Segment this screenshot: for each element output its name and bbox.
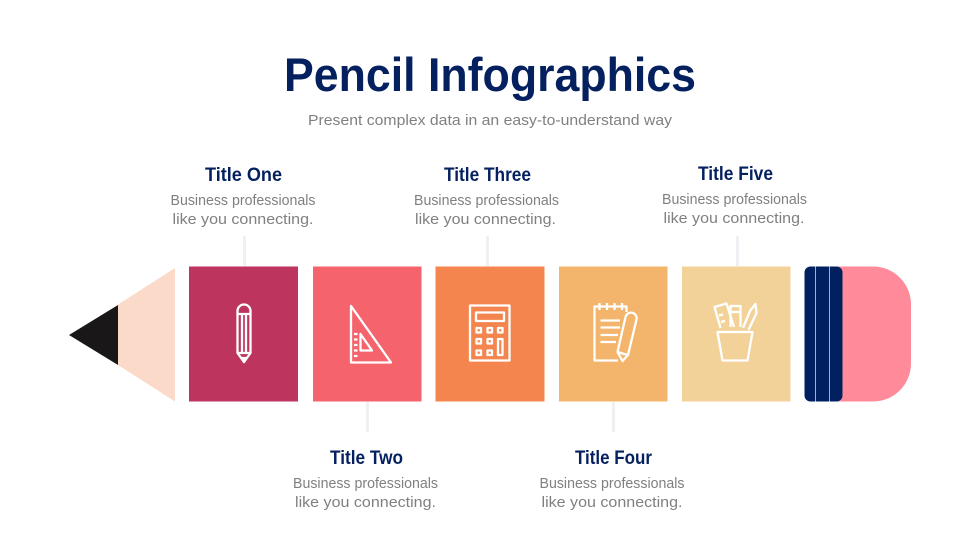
text block: title five: Title Five bbox=[698, 164, 773, 185]
text block: title one bbox=[170, 165, 316, 228]
text block: title three bbox=[414, 165, 559, 228]
text block: title three: like you connecting. bbox=[415, 212, 556, 228]
text block: title two: Business professionals bbox=[293, 476, 438, 492]
text block: title two: Title Two bbox=[330, 448, 403, 469]
text block: title five: like you connecting. bbox=[664, 211, 804, 227]
text block: title two: like you connecting. bbox=[295, 495, 436, 511]
text block: title three: Business professionals bbox=[414, 193, 559, 209]
connector: title three bbox=[486, 236, 489, 266]
text block: title one: like you connecting. bbox=[172, 212, 314, 228]
connector: title four bbox=[612, 402, 615, 432]
text block: title four bbox=[540, 448, 684, 511]
pencil tip: lead bbox=[69, 305, 118, 365]
icon: pencil cup bbox=[714, 304, 756, 360]
title: Pencil Infographics bbox=[284, 48, 696, 101]
icon: notepad and pencil bbox=[594, 303, 637, 361]
eraser bbox=[835, 266, 911, 402]
panel: segment four with notepad icon bbox=[559, 266, 668, 402]
connector: title two bbox=[366, 402, 369, 432]
pencil tip: wood bbox=[118, 268, 175, 402]
connector: title one bbox=[243, 236, 246, 266]
icon: calculator bbox=[470, 306, 510, 360]
text block: title two bbox=[293, 448, 438, 511]
subtitle: Present complex data in an easy-to-understand way bbox=[308, 112, 673, 129]
text block: title four: Business professionals bbox=[540, 476, 684, 492]
panel: segment five with pencil cup icon bbox=[682, 266, 790, 402]
text block: title one: Business professionals bbox=[170, 193, 316, 209]
text block: title four: Title Four bbox=[575, 448, 653, 469]
panel: segment one with pencil icon bbox=[189, 266, 298, 402]
text block: title one: Title One bbox=[205, 165, 282, 186]
text block: title four: like you connecting. bbox=[542, 495, 682, 511]
icon: pencil bbox=[238, 305, 250, 362]
connector: title five bbox=[736, 236, 739, 266]
ferrule bbox=[804, 266, 842, 402]
icon: set square bbox=[351, 306, 391, 362]
panel: segment two with set square icon bbox=[313, 266, 422, 402]
text block: title five bbox=[662, 164, 807, 227]
panel: segment three with calculator icon bbox=[436, 266, 544, 402]
text block: title five: Business professionals bbox=[662, 192, 807, 208]
text block: title three: Title Three bbox=[444, 165, 531, 186]
